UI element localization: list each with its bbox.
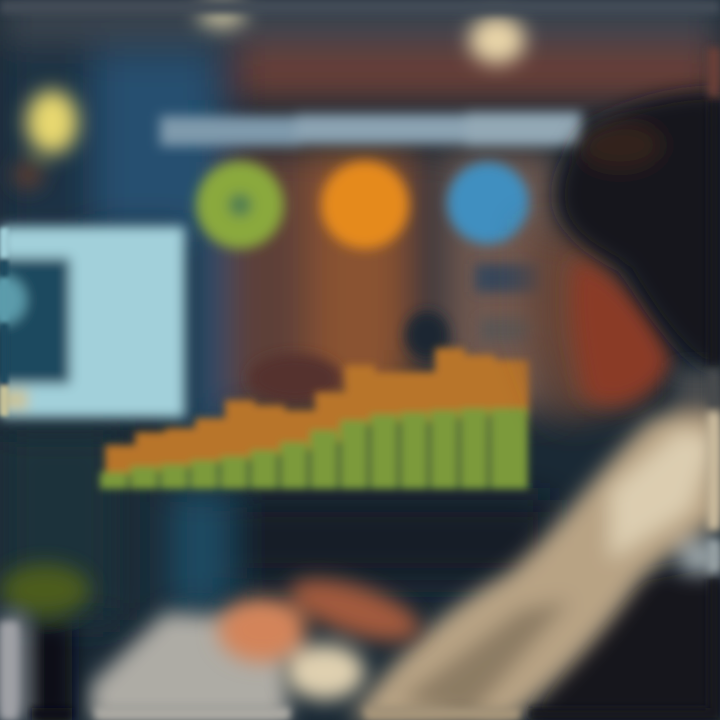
orange circle metric: [321, 161, 409, 249]
hands on keyboard: [218, 566, 427, 700]
person's ear and neck: [571, 260, 672, 405]
green lower bars: [100, 408, 528, 489]
dashboard title bar: [160, 112, 582, 146]
wall lamp: [12, 90, 78, 189]
monitor: [0, 226, 185, 418]
ceiling lights: [198, 0, 525, 64]
orange upper bars: [105, 348, 529, 475]
potted plant: [0, 564, 90, 720]
green circle metric: [196, 161, 284, 249]
person's dark torso: [525, 560, 720, 720]
person's hair: [558, 92, 720, 375]
person's skin behind ear: [530, 230, 640, 420]
small dashboard details: [249, 264, 543, 402]
bar chart: [100, 348, 529, 489]
monitor edge at frame: [0, 228, 8, 416]
desk paper: [90, 612, 290, 720]
sweater arm: [350, 370, 720, 720]
blue circle metric: [447, 162, 529, 244]
